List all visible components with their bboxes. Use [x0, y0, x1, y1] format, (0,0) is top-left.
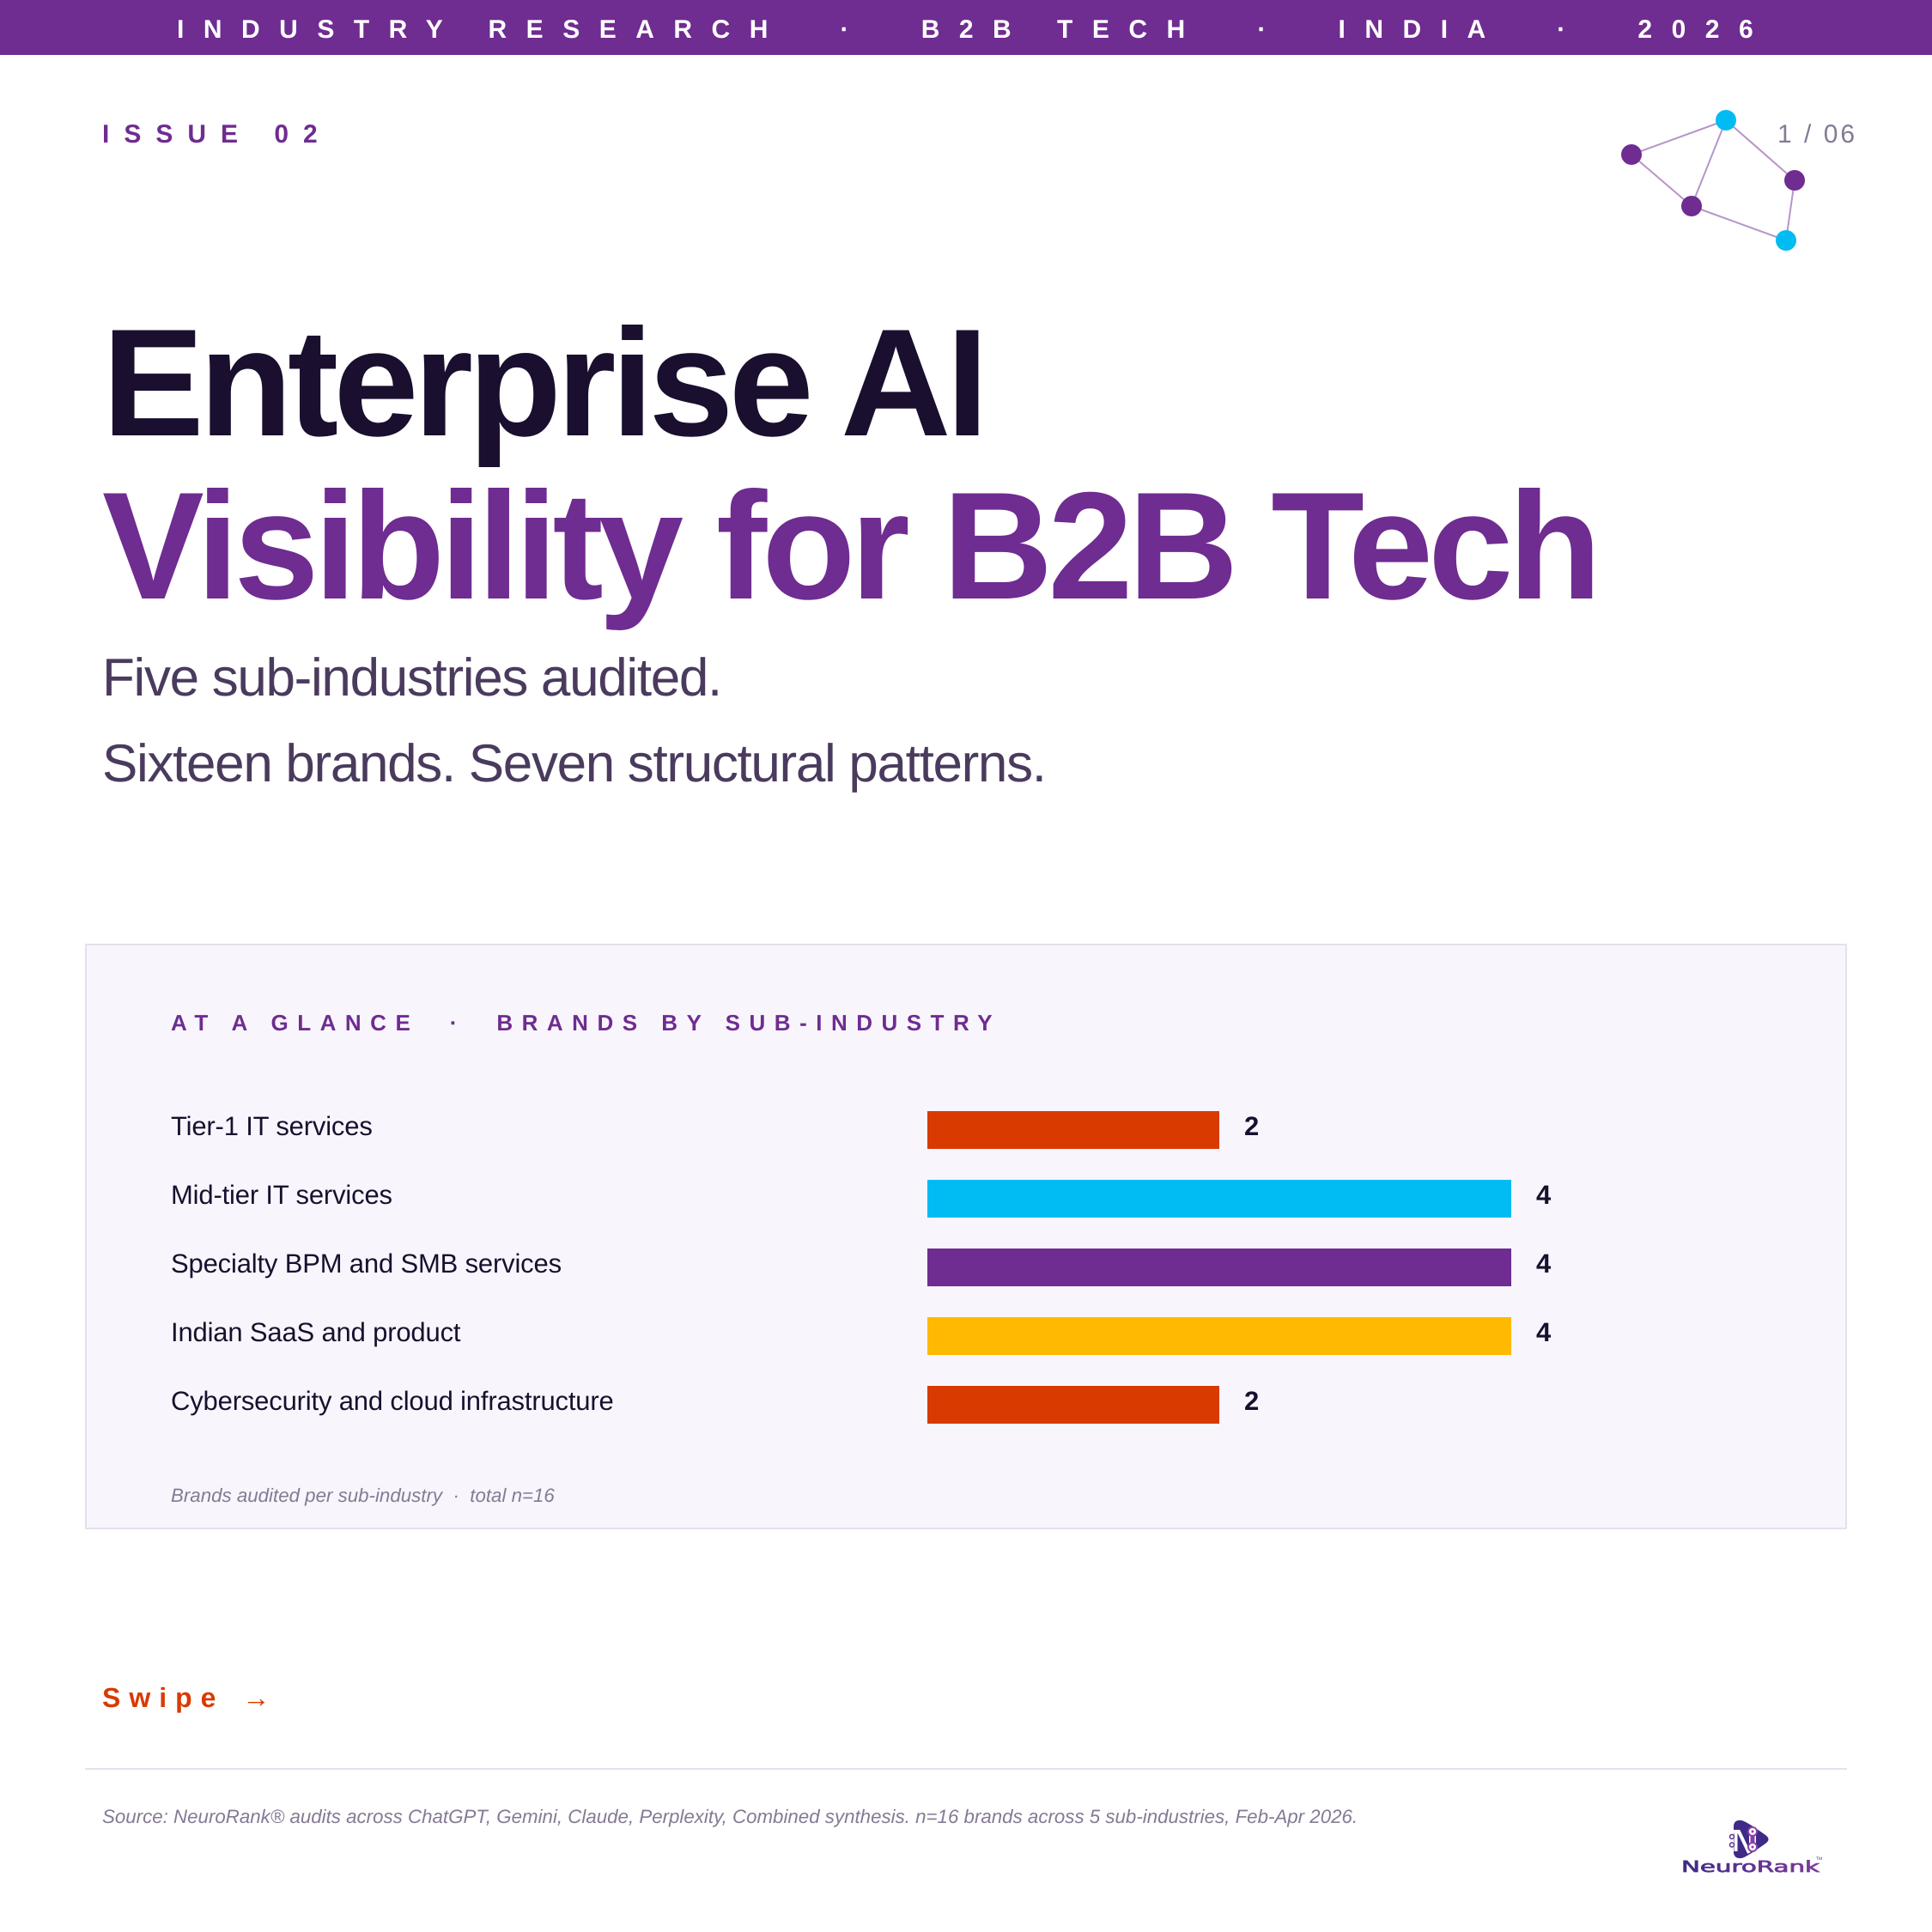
row: Indian SaaS and product: 4 [1536, 1317, 1551, 1347]
title: Enterprise AI [102, 297, 984, 468]
row: Tier-1 IT services: 2 [1244, 1111, 1259, 1141]
source text: Source: NeuroRank® audits across ChatGPT, Gemini, Claude, Perplexity, Combined synthesis. n=16 brands across 5 sub-industries, Feb-Apr 2026. [102, 1806, 1358, 1827]
row: Specialty BPM and SMB services: Specialty BPM and SMB services [171, 1249, 562, 1279]
row: Cybersecurity and cloud infrastructure [171, 1386, 1259, 1424]
network icon [1621, 110, 1805, 251]
subtitle [102, 648, 1046, 793]
top banner [0, 0, 1932, 55]
logo: NeuroRank [1681, 1820, 1822, 1876]
row: Tier-1 IT services: Tier-1 IT services [171, 1111, 373, 1141]
subtitle: Five sub-industries audited. [102, 648, 721, 708]
title: Visibility for B2B Tech [102, 460, 1597, 631]
logo: NeuroRank: TM [1816, 1856, 1822, 1862]
chart note: Brands audited per sub-industry · total n=16 [171, 1485, 555, 1506]
issue label: ISSUE 02 [102, 120, 332, 149]
panel: at a glance [85, 944, 1847, 1529]
bar chart [171, 1111, 1551, 1424]
swipe prompt: Swipe → [102, 1682, 278, 1713]
row: Mid-tier IT services: Mid-tier IT services [171, 1180, 392, 1210]
logo: NeuroRank: NeuroRank [1681, 1858, 1820, 1876]
row: Indian SaaS and product: Indian SaaS and product [171, 1317, 460, 1347]
row: Mid-tier IT services: 4 [1536, 1180, 1551, 1210]
row: Mid-tier IT services [171, 1180, 1551, 1218]
row: Tier-1 IT services [171, 1111, 1259, 1149]
row: Specialty BPM and SMB services [171, 1249, 1551, 1286]
row: Specialty BPM and SMB services: 4 [1536, 1249, 1551, 1279]
footer divider [85, 1768, 1847, 1770]
page number: 1 / 06 [1777, 120, 1857, 149]
row: Cybersecurity and cloud infrastructure: 2 [1244, 1386, 1259, 1416]
row: Indian SaaS and product [171, 1317, 1551, 1355]
row: Cybersecurity and cloud infrastructure: Cybersecurity and cloud infrastructure [171, 1386, 614, 1416]
top banner: INDUSTRY RESEARCH · B2B TECH · INDIA · 2026 [177, 15, 1772, 44]
panel heading: AT A GLANCE · BRANDS BY SUB-INDUSTRY [171, 1010, 1001, 1036]
title [102, 297, 1597, 631]
subtitle: Sixteen brands. Seven structural patterns. [102, 734, 1046, 793]
